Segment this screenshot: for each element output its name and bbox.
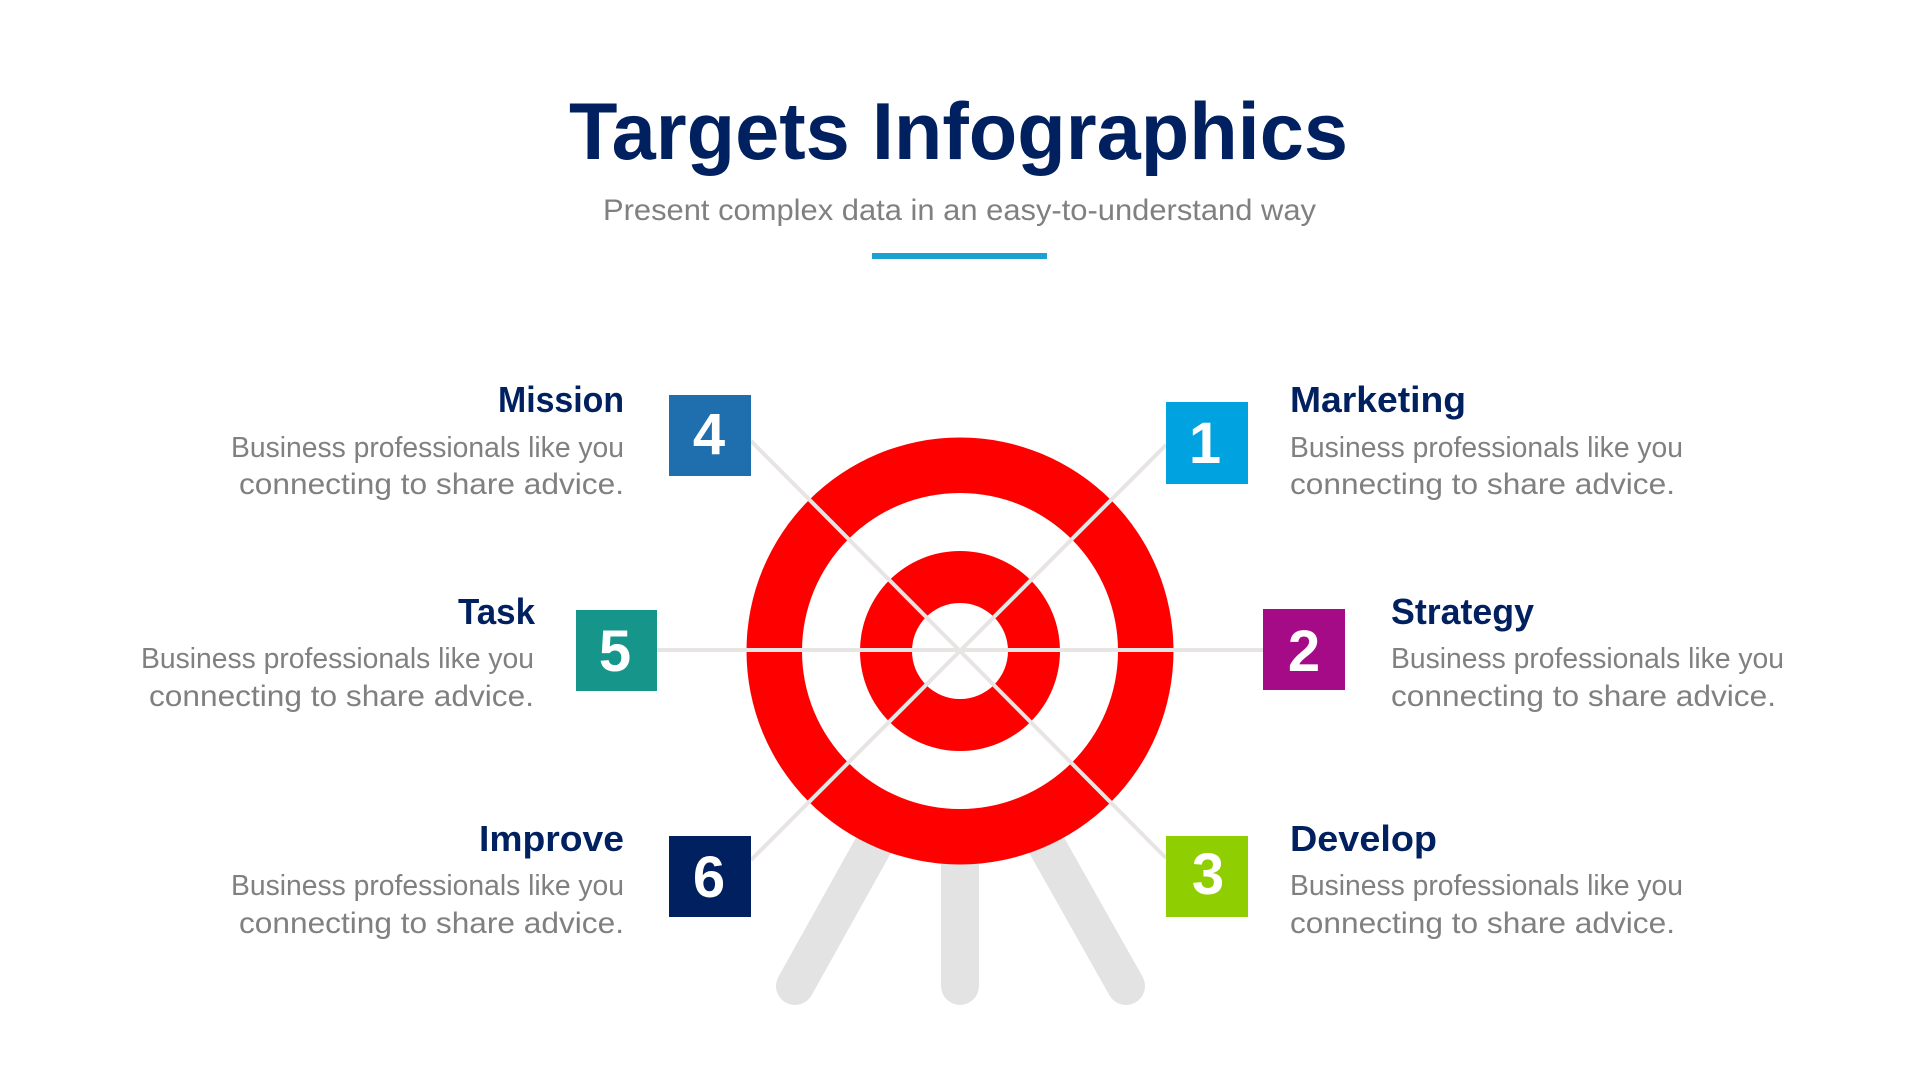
item 1: Marketing: 1 xyxy=(1189,411,1221,476)
item 5: Task xyxy=(141,591,657,713)
item 3: Develop: 3 xyxy=(1192,842,1224,907)
item 5: Task: Business professionals like you xyxy=(141,643,534,675)
item 2: Strategy: connecting to share advice. xyxy=(1391,680,1776,713)
item 2: Strategy: Business professionals like you xyxy=(1391,643,1784,675)
target stand legs xyxy=(795,830,1126,986)
item 3: Develop: Business professionals like you xyxy=(1290,870,1683,902)
item 6: Improve: Improve xyxy=(479,818,624,859)
title accent bar xyxy=(872,253,1047,259)
item 6: Improve xyxy=(231,818,751,940)
item 3: Develop: connecting to share advice. xyxy=(1290,907,1675,940)
item 3: Develop xyxy=(1166,818,1683,940)
item 1: Marketing xyxy=(1166,379,1683,501)
item 3: Develop: Develop xyxy=(1290,818,1437,859)
item 6: Improve: 6 xyxy=(693,845,725,910)
item 1: Marketing: connecting to share advice. xyxy=(1290,468,1675,501)
item 4: Mission xyxy=(231,379,751,501)
item 2: Strategy: Strategy xyxy=(1391,591,1534,632)
item 5: Task: connecting to share advice. xyxy=(149,680,534,713)
item 6: Improve: connecting to share advice. xyxy=(239,907,624,940)
item 2: Strategy xyxy=(1263,591,1784,713)
item 4: Mission: connecting to share advice. xyxy=(239,468,624,501)
item 4: Mission: 4 xyxy=(693,402,725,467)
item 5: Task: 5 xyxy=(599,619,631,684)
item 4: Mission: Mission xyxy=(498,379,624,420)
item 1: Marketing: Marketing xyxy=(1290,379,1466,420)
subtitle: Present complex data in an easy-to-understand way xyxy=(603,194,1316,227)
title: Targets Infographics xyxy=(569,87,1348,177)
target rings xyxy=(746,438,1174,864)
item 1: Marketing: Business professionals like you xyxy=(1290,432,1683,464)
item 6: Improve: Business professionals like you xyxy=(231,870,624,902)
connector lines xyxy=(657,441,1263,860)
item 4: Mission: Business professionals like you xyxy=(231,432,624,464)
item 2: Strategy: 2 xyxy=(1288,619,1320,684)
item 5: Task: Task xyxy=(458,591,536,632)
